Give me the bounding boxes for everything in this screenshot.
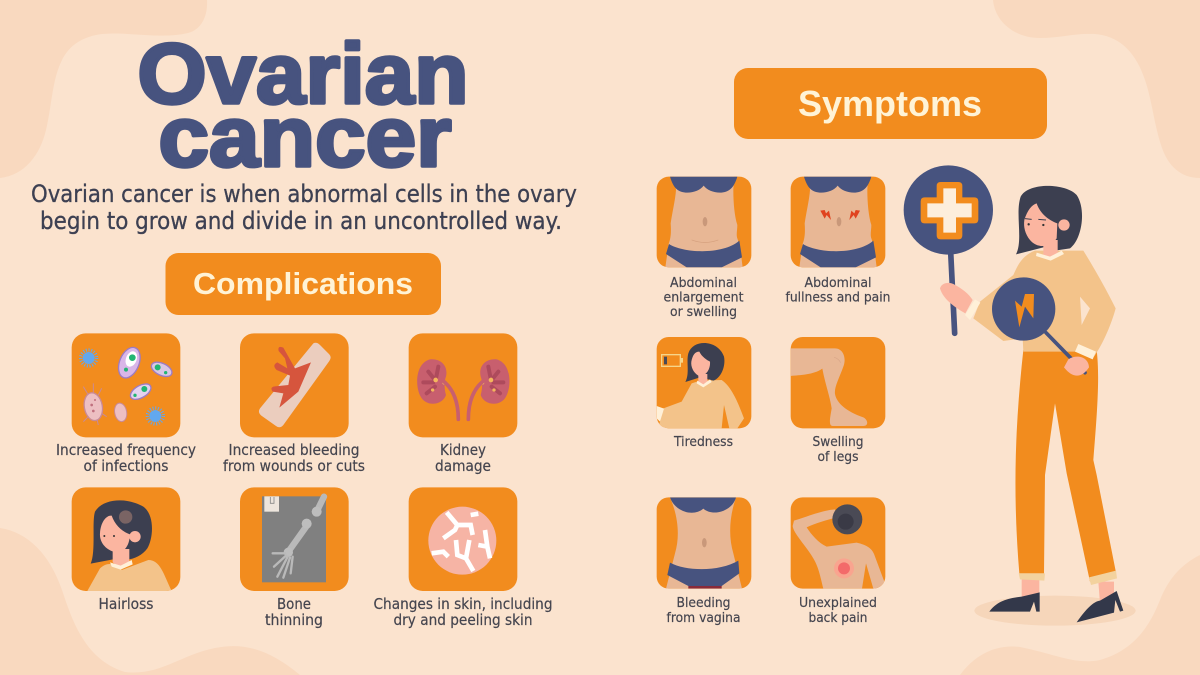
- labels: complications: thinning: [265, 611, 323, 629]
- illustration: woman holding signs: [904, 165, 1136, 626]
- labels: complications: dry and peeling skin: [394, 611, 532, 629]
- heading: symptoms: [734, 68, 1047, 139]
- labels: symptoms: Bleeding: [676, 595, 730, 611]
- labels: complications: Kidney: [440, 441, 486, 459]
- labels: complications: Hairloss: [98, 595, 154, 613]
- heading: complications: [166, 253, 441, 315]
- icon: hair loss: [72, 487, 180, 591]
- sign: medical cross: [904, 165, 993, 333]
- icon: back pain: [791, 497, 885, 589]
- heading: symptoms: Symptoms: [798, 83, 982, 124]
- labels: complications: of infections: [84, 457, 169, 475]
- labels: complications: Increased bleeding: [228, 441, 360, 459]
- labels: symptoms: fullness and pain: [786, 290, 890, 306]
- sweater: [940, 251, 1116, 359]
- icon: x-ray bone: [240, 487, 349, 591]
- panel: symptoms icons: [657, 177, 885, 589]
- labels: complications: from wounds or cuts: [223, 457, 365, 475]
- labels: symptoms: enlargement: [664, 290, 744, 306]
- icon: bleeding wound: [240, 333, 349, 437]
- labels: symptoms: [664, 275, 890, 626]
- labels: symptoms: Unexplained: [799, 595, 877, 611]
- heading: complications: Complications: [193, 266, 413, 301]
- labels: symptoms: back pain: [808, 610, 868, 626]
- icon: infections: [72, 333, 180, 437]
- icon: abdominal swelling: [657, 177, 751, 267]
- labels: symptoms: of legs: [818, 449, 858, 465]
- sign: lightning bolt: [992, 277, 1089, 376]
- labels: complications: [56, 441, 552, 629]
- intro text: Ovarian cancer is when abnormal cells in the ovary: [31, 180, 577, 208]
- labels: symptoms: from vagina: [666, 610, 740, 626]
- icon: bleeding: [657, 497, 751, 589]
- title: cancer: [158, 90, 452, 185]
- labels: complications: Increased frequency: [56, 441, 196, 459]
- legs and shoes: [989, 350, 1123, 622]
- labels: complications: Bone: [277, 595, 311, 613]
- labels: complications: damage: [435, 457, 491, 475]
- head: [1016, 186, 1082, 261]
- intro text: begin to grow and divide in an uncontrolled way.: [40, 207, 562, 235]
- title: [138, 27, 468, 185]
- icon: tiredness: [657, 337, 751, 428]
- labels: symptoms: Tiredness: [673, 434, 733, 450]
- icon: abdominal pain: [791, 177, 885, 267]
- labels: symptoms: or swelling: [670, 304, 737, 320]
- intro text: [31, 180, 577, 235]
- icon: kidneys: [409, 333, 517, 437]
- labels: symptoms: Swelling: [812, 434, 864, 450]
- labels: symptoms: Abdominal: [670, 275, 737, 291]
- icon: dry skin: [409, 487, 517, 591]
- labels: complications: Changes in skin, including: [374, 595, 552, 613]
- panel: complications icons: [72, 333, 517, 591]
- icon: swollen leg: [791, 337, 885, 428]
- labels: symptoms: Abdominal: [804, 275, 872, 291]
- title: Ovarian: [138, 27, 468, 122]
